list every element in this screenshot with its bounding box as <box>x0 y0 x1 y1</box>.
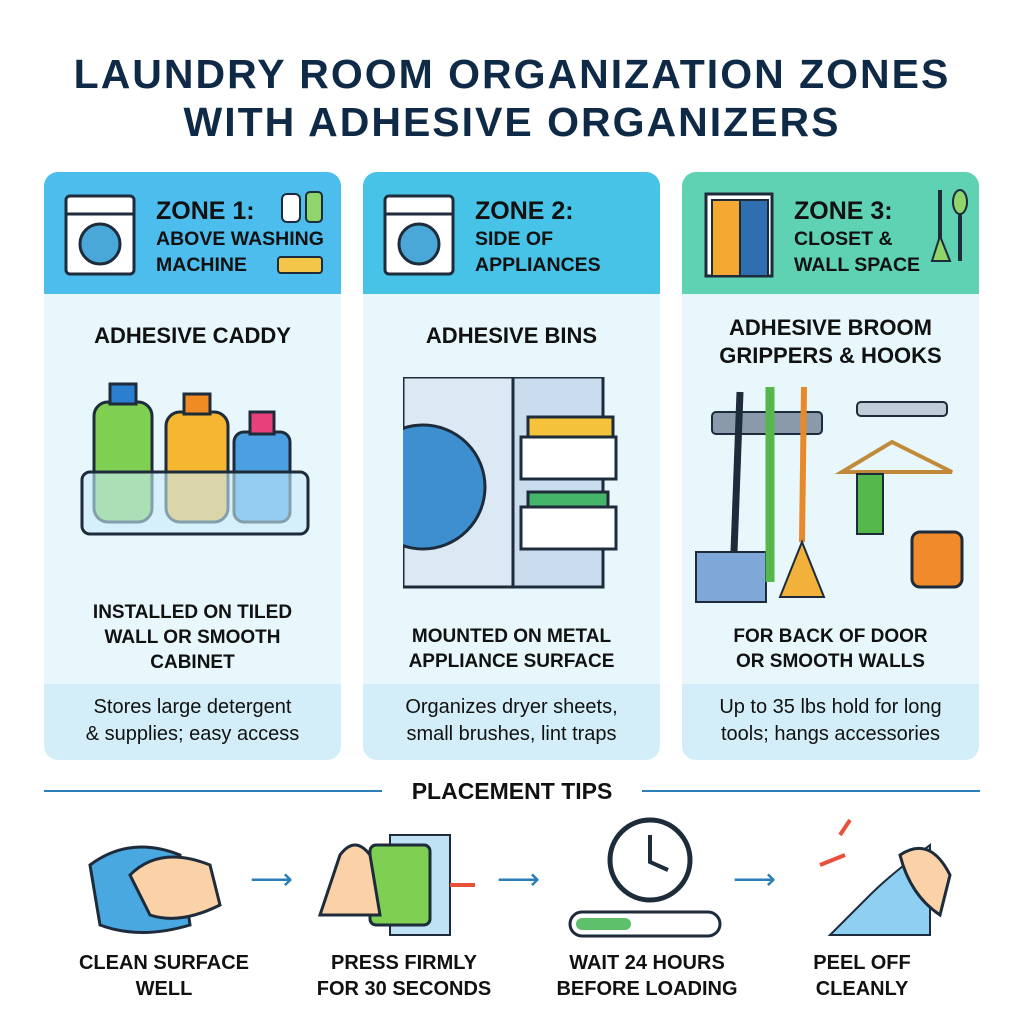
panel: zone 2 <box>363 172 660 760</box>
zone 1 header: ZONE 1: <box>156 197 255 225</box>
text: WAIT 24 HOURS <box>569 952 725 974</box>
title: LAUNDRY ROOM ORGANIZATION ZONES <box>74 51 950 97</box>
text: BEFORE LOADING <box>556 978 738 1000</box>
icon: broom <box>930 189 968 262</box>
zone 3 header: CLOSET & <box>794 228 893 250</box>
illustration: bins on appliance <box>403 377 618 588</box>
text: PEEL OFF <box>813 952 911 974</box>
zone 2 header: ZONE 2: <box>475 197 574 225</box>
title: WITH ADHESIVE ORGANIZERS <box>184 99 840 145</box>
tip 3: wait <box>568 818 722 938</box>
tip 1: clean <box>88 846 222 934</box>
tip 4: peel <box>819 818 952 936</box>
icon: washing machine <box>64 194 136 276</box>
subheading: ADHESIVE CADDY <box>94 323 291 348</box>
installation note: OR SMOOTH WALLS <box>736 651 925 672</box>
text: PRESS FIRMLY <box>331 952 477 974</box>
zone 1 header: ABOVE WASHING <box>156 228 324 250</box>
panel: zone 1 <box>44 172 341 760</box>
tip labels: WELL <box>136 978 192 1000</box>
zone 3 header: ZONE 3: <box>794 197 893 225</box>
zone 1 header <box>44 172 341 294</box>
title <box>74 51 950 145</box>
footer text: Organizes dryer sheets, <box>405 696 618 718</box>
footer text: tools; hangs accessories <box>721 723 940 745</box>
zone 2 header: SIDE OF <box>475 228 553 250</box>
installation note: WALL OR SMOOTH <box>105 627 280 648</box>
tip labels: CLEAN SURFACE <box>79 952 249 974</box>
tip 2: press <box>318 834 475 936</box>
zone 3 header: WALL SPACE <box>794 254 920 276</box>
installation note <box>93 602 292 673</box>
arrow 1: ⟶ <box>250 863 293 896</box>
footer text: & supplies; easy access <box>86 723 299 745</box>
zone 1 header: MACHINE <box>156 254 247 276</box>
icon: bottles <box>281 191 323 223</box>
text: CLEANLY <box>816 978 908 1000</box>
footer text: Up to 35 lbs hold for long <box>719 696 942 718</box>
icon: appliance <box>384 194 454 276</box>
footer text <box>682 684 979 760</box>
illustration: brooms and hooks <box>695 387 964 603</box>
zone 3 header <box>682 172 979 294</box>
icon: tray <box>277 256 323 274</box>
illustration: caddy with bottles <box>80 382 310 536</box>
footer text: Stores large detergent <box>94 696 291 718</box>
installation note: APPLIANCE SURFACE <box>409 651 614 672</box>
footer text <box>44 684 341 760</box>
zone 2 header <box>363 172 660 294</box>
subheading: GRIPPERS & HOOKS <box>719 343 942 368</box>
footer text: small brushes, lint traps <box>406 723 617 745</box>
tip labels <box>79 952 249 1000</box>
subheading: ADHESIVE BINS <box>426 323 597 348</box>
placement tips heading: PLACEMENT TIPS <box>412 778 612 804</box>
arrow 3: ⟶ <box>733 863 776 896</box>
footer text <box>363 684 660 760</box>
text: FOR 30 SECONDS <box>317 978 491 1000</box>
subheading: ADHESIVE BROOM <box>729 315 932 340</box>
installation note <box>733 626 928 672</box>
panel: zone 3 <box>682 172 979 760</box>
installation note: INSTALLED ON TILED <box>93 602 292 623</box>
icon: closet <box>704 192 774 278</box>
subheading <box>719 315 942 368</box>
zone 2 header: APPLIANCES <box>475 254 601 276</box>
installation note: MOUNTED ON METAL <box>412 626 611 647</box>
arrow 2: ⟶ <box>497 863 540 896</box>
installation note: FOR BACK OF DOOR <box>733 626 928 647</box>
installation note: CABINET <box>150 652 235 673</box>
installation note <box>409 626 614 672</box>
